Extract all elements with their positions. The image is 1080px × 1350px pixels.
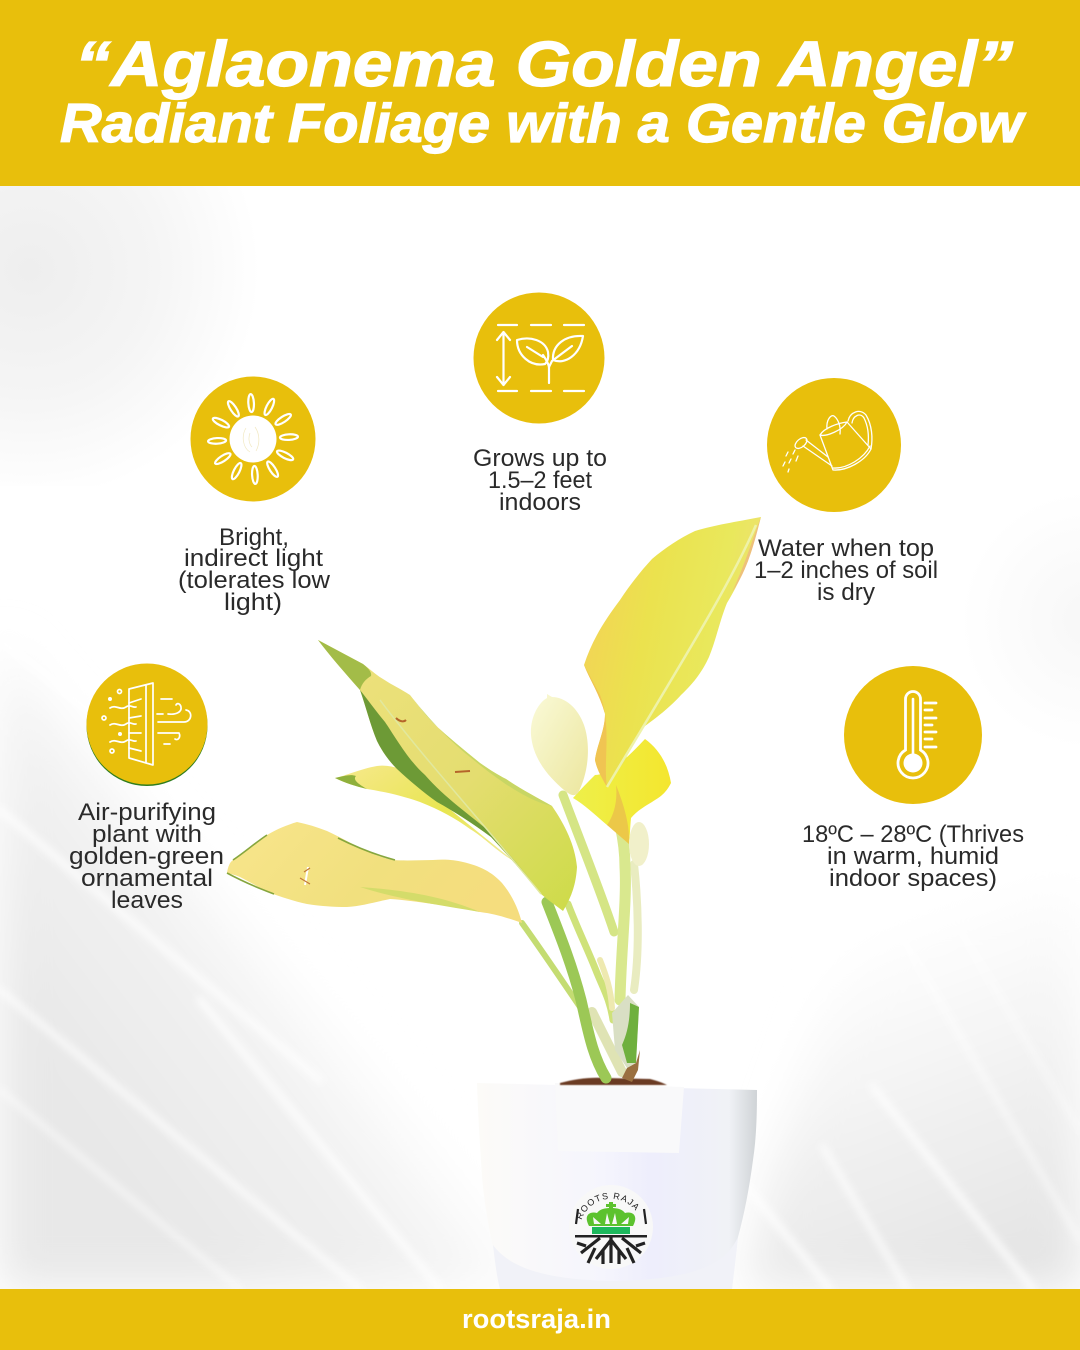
text: height: [473, 445, 607, 516]
icon: plant height: [474, 292, 604, 424]
logo sticker: ROOTS RAJA: [578, 1192, 638, 1220]
icon: sun: [190, 376, 316, 502]
text: water: is dry: [817, 579, 875, 606]
main top leaf: [584, 517, 761, 787]
icon: air filter: [86, 664, 208, 786]
text: light: light): [224, 589, 282, 616]
icon: watering can: [767, 378, 901, 512]
text: height: 1.5–2 feet: [488, 467, 592, 494]
stems: [522, 785, 638, 1078]
text: light: Bright,: [219, 524, 289, 551]
panel: air purifying: [69, 664, 224, 914]
panel: light: [178, 376, 331, 616]
logo sticker: [574, 1192, 653, 1264]
title: “Aglaonema Golden Angel”: [75, 28, 1013, 100]
text: air purifying: [69, 799, 224, 914]
flower bud: [531, 694, 588, 795]
text: height: Grows up to: [473, 445, 607, 472]
roots: [577, 1237, 645, 1264]
text: temperature: indoor spaces): [829, 865, 997, 892]
panel: height: [473, 292, 607, 516]
icon: thermometer: [844, 666, 982, 804]
text: water: 1–2 inches of soil: [754, 557, 938, 584]
crown: [587, 1202, 635, 1234]
text: temperature: in warm, humid: [827, 843, 999, 870]
plant pot with logo: [494, 1088, 757, 1289]
text: air purifying: leaves: [111, 887, 183, 914]
plant: [227, 517, 761, 1085]
subtitle: Radiant Foliage with a Gentle Glow: [60, 92, 1026, 154]
large variegated leaf: [318, 640, 577, 911]
soil: [560, 1078, 667, 1085]
header banner: [0, 0, 1080, 186]
lower left leaf: [227, 822, 522, 923]
text: light: indirect light: [184, 545, 323, 572]
text: water: Water when top: [758, 535, 934, 562]
panel: water: [754, 378, 938, 606]
back yellow leaf: [573, 739, 671, 844]
text: light: [178, 524, 331, 616]
footer banner: [0, 1289, 1080, 1350]
website: rootsraja.in: [462, 1304, 611, 1334]
plant base: [612, 995, 639, 1068]
text: air purifying: golden-green: [69, 843, 224, 870]
text: light: (tolerates low: [178, 567, 331, 594]
pot body: [477, 1083, 757, 1289]
middle leaf: [335, 766, 515, 862]
text: temperature: [802, 821, 1024, 892]
small bud: [629, 822, 649, 866]
panel: temperature: [802, 666, 1024, 892]
text: height: indoors: [499, 489, 581, 516]
text: air purifying: plant with: [92, 821, 202, 848]
text: temperature: 18ºC – 28ºC (Thrives: [802, 821, 1024, 848]
text: air purifying: Air-purifying: [78, 799, 216, 826]
text: water: [754, 535, 938, 606]
text: air purifying: ornamental: [81, 865, 213, 892]
